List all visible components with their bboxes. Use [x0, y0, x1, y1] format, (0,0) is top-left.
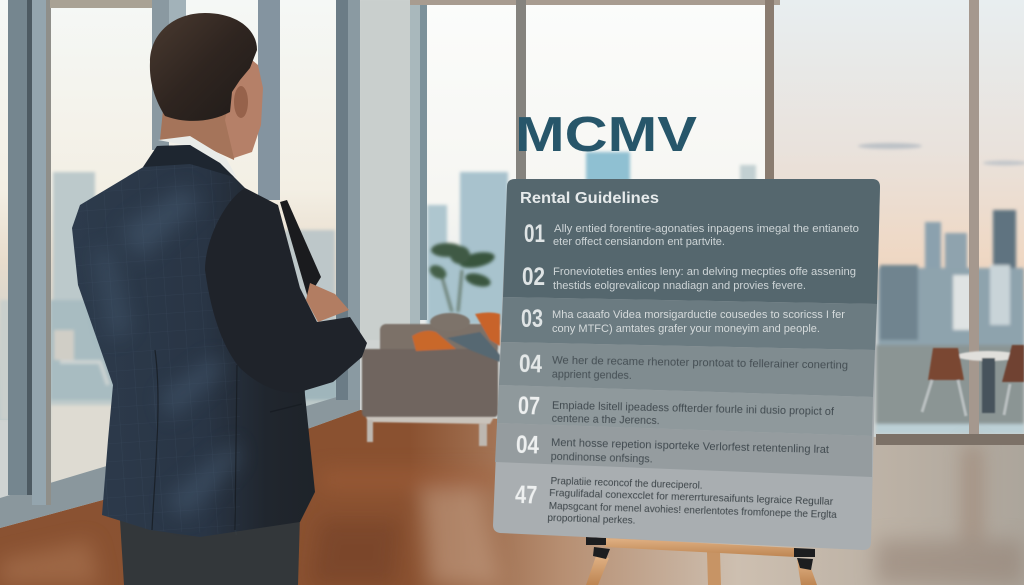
item 04 second: pondinonse onfsings.	[551, 451, 653, 465]
item 02: Fronevioteties enties leny: an delving mecpties offe assening	[553, 266, 856, 278]
ear	[234, 86, 248, 118]
item 04 second	[516, 431, 829, 470]
item 07	[518, 392, 835, 431]
rental guidelines board	[493, 179, 880, 550]
item 04 second: 04	[516, 431, 539, 459]
left balcony chair	[54, 330, 108, 385]
sleeve	[205, 188, 367, 393]
item 04: apprient gendes.	[552, 369, 632, 382]
wall pillar	[360, 0, 420, 340]
jacket collar	[143, 145, 234, 177]
jacket body	[72, 145, 315, 537]
folder under arm	[280, 200, 321, 298]
jacket highlights	[95, 185, 240, 520]
item 07: centene a the Jerencs.	[552, 413, 660, 427]
sofa with cushions	[362, 312, 500, 446]
item 01: 01	[524, 220, 545, 248]
floor	[0, 410, 1024, 585]
item 02: 02	[522, 263, 545, 291]
item 04: We her de recame rhenoter prontoat to fellerainer conerting	[552, 355, 848, 372]
jacket seams	[152, 350, 302, 530]
neck	[160, 100, 240, 160]
plant	[427, 243, 496, 312]
item 47: Mapsgcant for menel avohies! enerlentotes fromfonepe the Erglta	[549, 500, 837, 521]
board background	[493, 179, 880, 550]
item 07: Empiade lsitell ipeadess offterder fourle ini dusio propict of	[552, 400, 835, 418]
item 01: Ally entied forentire-agonaties inpagens imegal the entianeto	[554, 223, 859, 235]
item 07: 07	[518, 392, 540, 420]
item 47: 47	[515, 481, 538, 510]
hand	[306, 283, 349, 322]
jacket plaid	[72, 150, 240, 535]
item 47: Fragulifadal conexcclet for mererrturesaifunts legraice Regullar	[549, 487, 834, 508]
easel legs	[586, 556, 609, 585]
logo heading: MCMV	[515, 108, 697, 162]
item 03: cony MTFC) amtates grafer your moneyim and people.	[552, 323, 820, 335]
item 47: proportional perkes.	[547, 512, 636, 527]
item 01: eter offect censiandom ent partvite.	[553, 236, 725, 248]
item 02: thestids eolgrevalicop nnadiagn and provies fevere.	[553, 280, 806, 292]
item 04 second: Ment hosse repetion isporteke Verlorfest retentenling lrat	[551, 437, 829, 456]
table and chairs	[922, 345, 1024, 416]
item 02	[522, 263, 856, 292]
face	[225, 50, 263, 158]
item 47	[514, 474, 838, 533]
band 4	[499, 342, 875, 397]
shirt collar	[158, 136, 237, 178]
band 1 and 2	[503, 179, 880, 304]
easel clamps	[586, 537, 815, 570]
band 3	[501, 297, 877, 350]
hair	[150, 13, 257, 121]
band 5	[497, 385, 873, 436]
item 03	[521, 305, 845, 335]
item 03: Mha caaafo Videa morsigarductie cousedes to scoricss I fer	[552, 309, 845, 321]
item 01	[524, 220, 859, 248]
trousers	[120, 515, 300, 585]
item 04	[519, 350, 848, 386]
man in suit, seen from behind	[72, 13, 367, 585]
item 47: Praplatiie reconcof the dureciperol.	[550, 475, 703, 492]
item 03: 03	[521, 305, 543, 333]
band 6	[495, 423, 872, 477]
easel crossbar	[605, 538, 796, 557]
easel	[586, 537, 817, 585]
board heading: Rental Guidelines	[520, 190, 659, 207]
item 04: 04	[519, 350, 542, 378]
